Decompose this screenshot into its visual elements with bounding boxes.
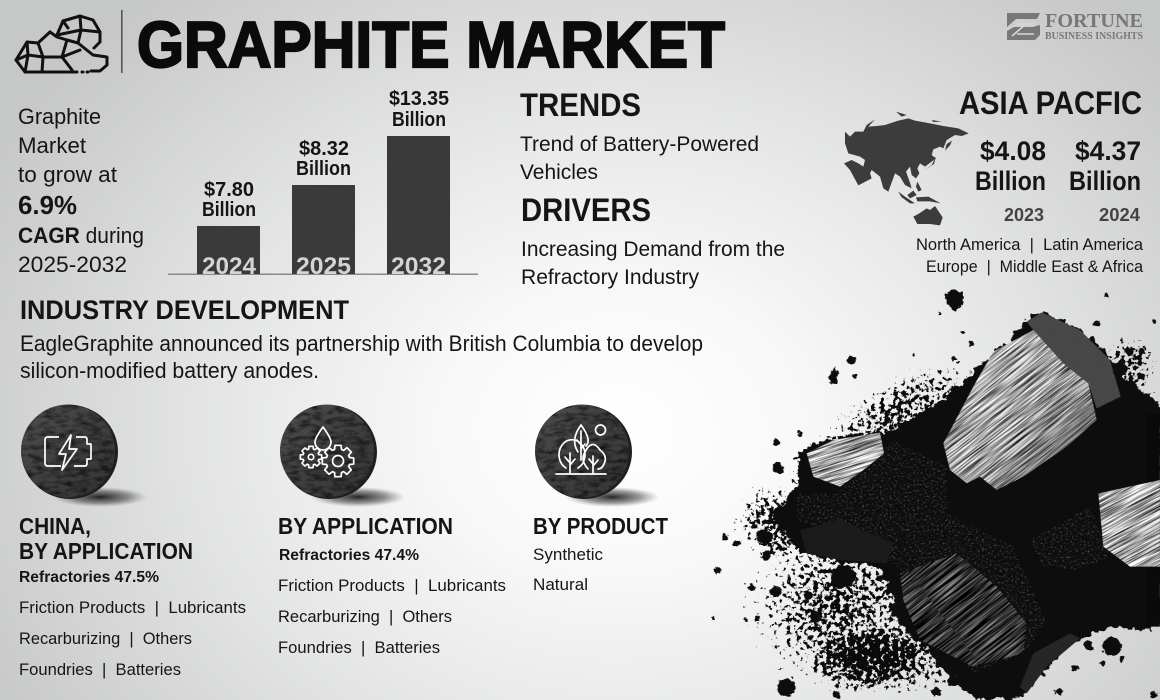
icon: battery coin bbox=[21, 404, 147, 507]
graphite rocks image bbox=[712, 290, 1160, 698]
asia pacific values: $4.37 bbox=[1075, 136, 1141, 166]
column: China by application bbox=[19, 513, 246, 679]
asia pacific map bbox=[844, 112, 969, 225]
text: CAGR summary: 6.9% bbox=[18, 190, 77, 220]
right edge fill bbox=[1147, 413, 1160, 627]
asia pacific values bbox=[959, 85, 1142, 225]
bar 2024: $7.80 bbox=[204, 179, 254, 201]
trends: Trend of Battery-Powered bbox=[520, 132, 759, 156]
industry development: EagleGraphite announced its partnership with British Columbia to develop bbox=[20, 331, 703, 356]
column: by product: Natural bbox=[533, 575, 588, 594]
column: by application: Recarburizing | Others bbox=[278, 607, 452, 626]
column: China by application: BY APPLICATION bbox=[19, 538, 193, 564]
bar 2024 bbox=[197, 179, 260, 280]
black rock mass bbox=[780, 313, 1160, 698]
title: GRAPHITE MARKET bbox=[137, 8, 725, 81]
asia pacific values: Billion bbox=[975, 166, 1046, 196]
icon: trees coin bbox=[535, 404, 659, 507]
asia pacific values: Billion bbox=[1069, 166, 1141, 196]
dark smooth faces bbox=[800, 520, 1080, 693]
bottom dark chunk bbox=[900, 553, 1027, 667]
bar 2025 bbox=[292, 138, 355, 280]
asia pacific values: 2024 bbox=[1099, 205, 1140, 225]
divider bbox=[121, 10, 123, 73]
icon: graphite rocks bbox=[16, 16, 107, 72]
column: China by application: Foundries | Batteries bbox=[19, 660, 181, 679]
trends: Vehicles bbox=[520, 160, 598, 184]
text: CAGR summary bbox=[18, 104, 144, 277]
bar 2032: Billion bbox=[392, 109, 446, 131]
icon: drop and gears coin bbox=[280, 404, 405, 507]
small left chunk bbox=[807, 433, 884, 487]
powder cloud bbox=[730, 330, 1160, 698]
column: by application: Foundries | Batteries bbox=[278, 638, 440, 657]
column: by application bbox=[278, 513, 506, 657]
column: by application: Friction Products | Lubricants bbox=[278, 576, 506, 595]
other regions: North America | Latin America bbox=[916, 235, 1144, 254]
drivers: DRIVERS bbox=[521, 192, 651, 228]
logo: Fortune Business Insights bbox=[1007, 10, 1143, 42]
gritty powder on mass bbox=[797, 440, 1110, 673]
right chunk bbox=[1098, 480, 1160, 567]
column: by product: BY PRODUCT bbox=[533, 513, 668, 539]
text: CAGR summary: Graphite bbox=[18, 104, 101, 129]
bar 2024: Billion bbox=[202, 199, 256, 221]
column: China by application: CHINA, bbox=[19, 513, 91, 539]
bar 2025: 2025 bbox=[296, 253, 351, 280]
column: China by application: Refractories 47.5% bbox=[19, 569, 159, 586]
bar 2025: $8.32 bbox=[299, 138, 349, 160]
other regions bbox=[916, 235, 1144, 276]
asia pacific values: $4.08 bbox=[980, 136, 1046, 166]
scattered debris bbox=[712, 290, 1157, 698]
logo: Fortune Business Insights: BUSINESS INSIGHTS bbox=[1045, 31, 1143, 42]
text: CAGR summary: 2025-2032 bbox=[18, 252, 127, 277]
industry development: INDUSTRY DEVELOPMENT bbox=[20, 295, 349, 325]
asia pacific values: ASIA PACFIC bbox=[959, 85, 1142, 121]
trends bbox=[520, 87, 759, 184]
bar 2032 bbox=[387, 88, 450, 280]
bar 2032: $13.35 bbox=[389, 88, 449, 110]
text: CAGR summary: CAGR during bbox=[18, 223, 144, 248]
text: CAGR summary: Market bbox=[18, 133, 87, 158]
column: China by application: Friction Products | Lubricants bbox=[19, 598, 246, 617]
bar chart: market size bbox=[168, 88, 478, 280]
drivers bbox=[521, 192, 785, 289]
other regions: Europe | Middle East & Africa bbox=[926, 257, 1144, 276]
bar 2024: 2024 bbox=[202, 253, 256, 280]
trends: TRENDS bbox=[520, 87, 641, 123]
industry development: silicon-modified battery anodes. bbox=[20, 358, 319, 383]
bar 2032: 2032 bbox=[391, 253, 446, 280]
asia pacific values: 2023 bbox=[1004, 205, 1044, 225]
text: CAGR summary: to grow at bbox=[18, 162, 118, 187]
column: by application: Refractories 47.4% bbox=[279, 547, 419, 564]
bar 2025: Billion bbox=[296, 158, 351, 180]
drivers: Increasing Demand from the bbox=[521, 237, 785, 261]
column: China by application: Recarburizing | Others bbox=[19, 629, 192, 648]
column: by product: Synthetic bbox=[533, 545, 603, 564]
top face of large chunk bbox=[1027, 312, 1121, 408]
large light chunk bbox=[943, 330, 1097, 490]
drivers: Refractory Industry bbox=[521, 265, 699, 289]
logo: Fortune Business Insights: FORTUNE bbox=[1045, 10, 1143, 32]
industry development bbox=[20, 295, 703, 383]
column: by product bbox=[533, 513, 668, 594]
column: by application: BY APPLICATION bbox=[278, 513, 453, 539]
